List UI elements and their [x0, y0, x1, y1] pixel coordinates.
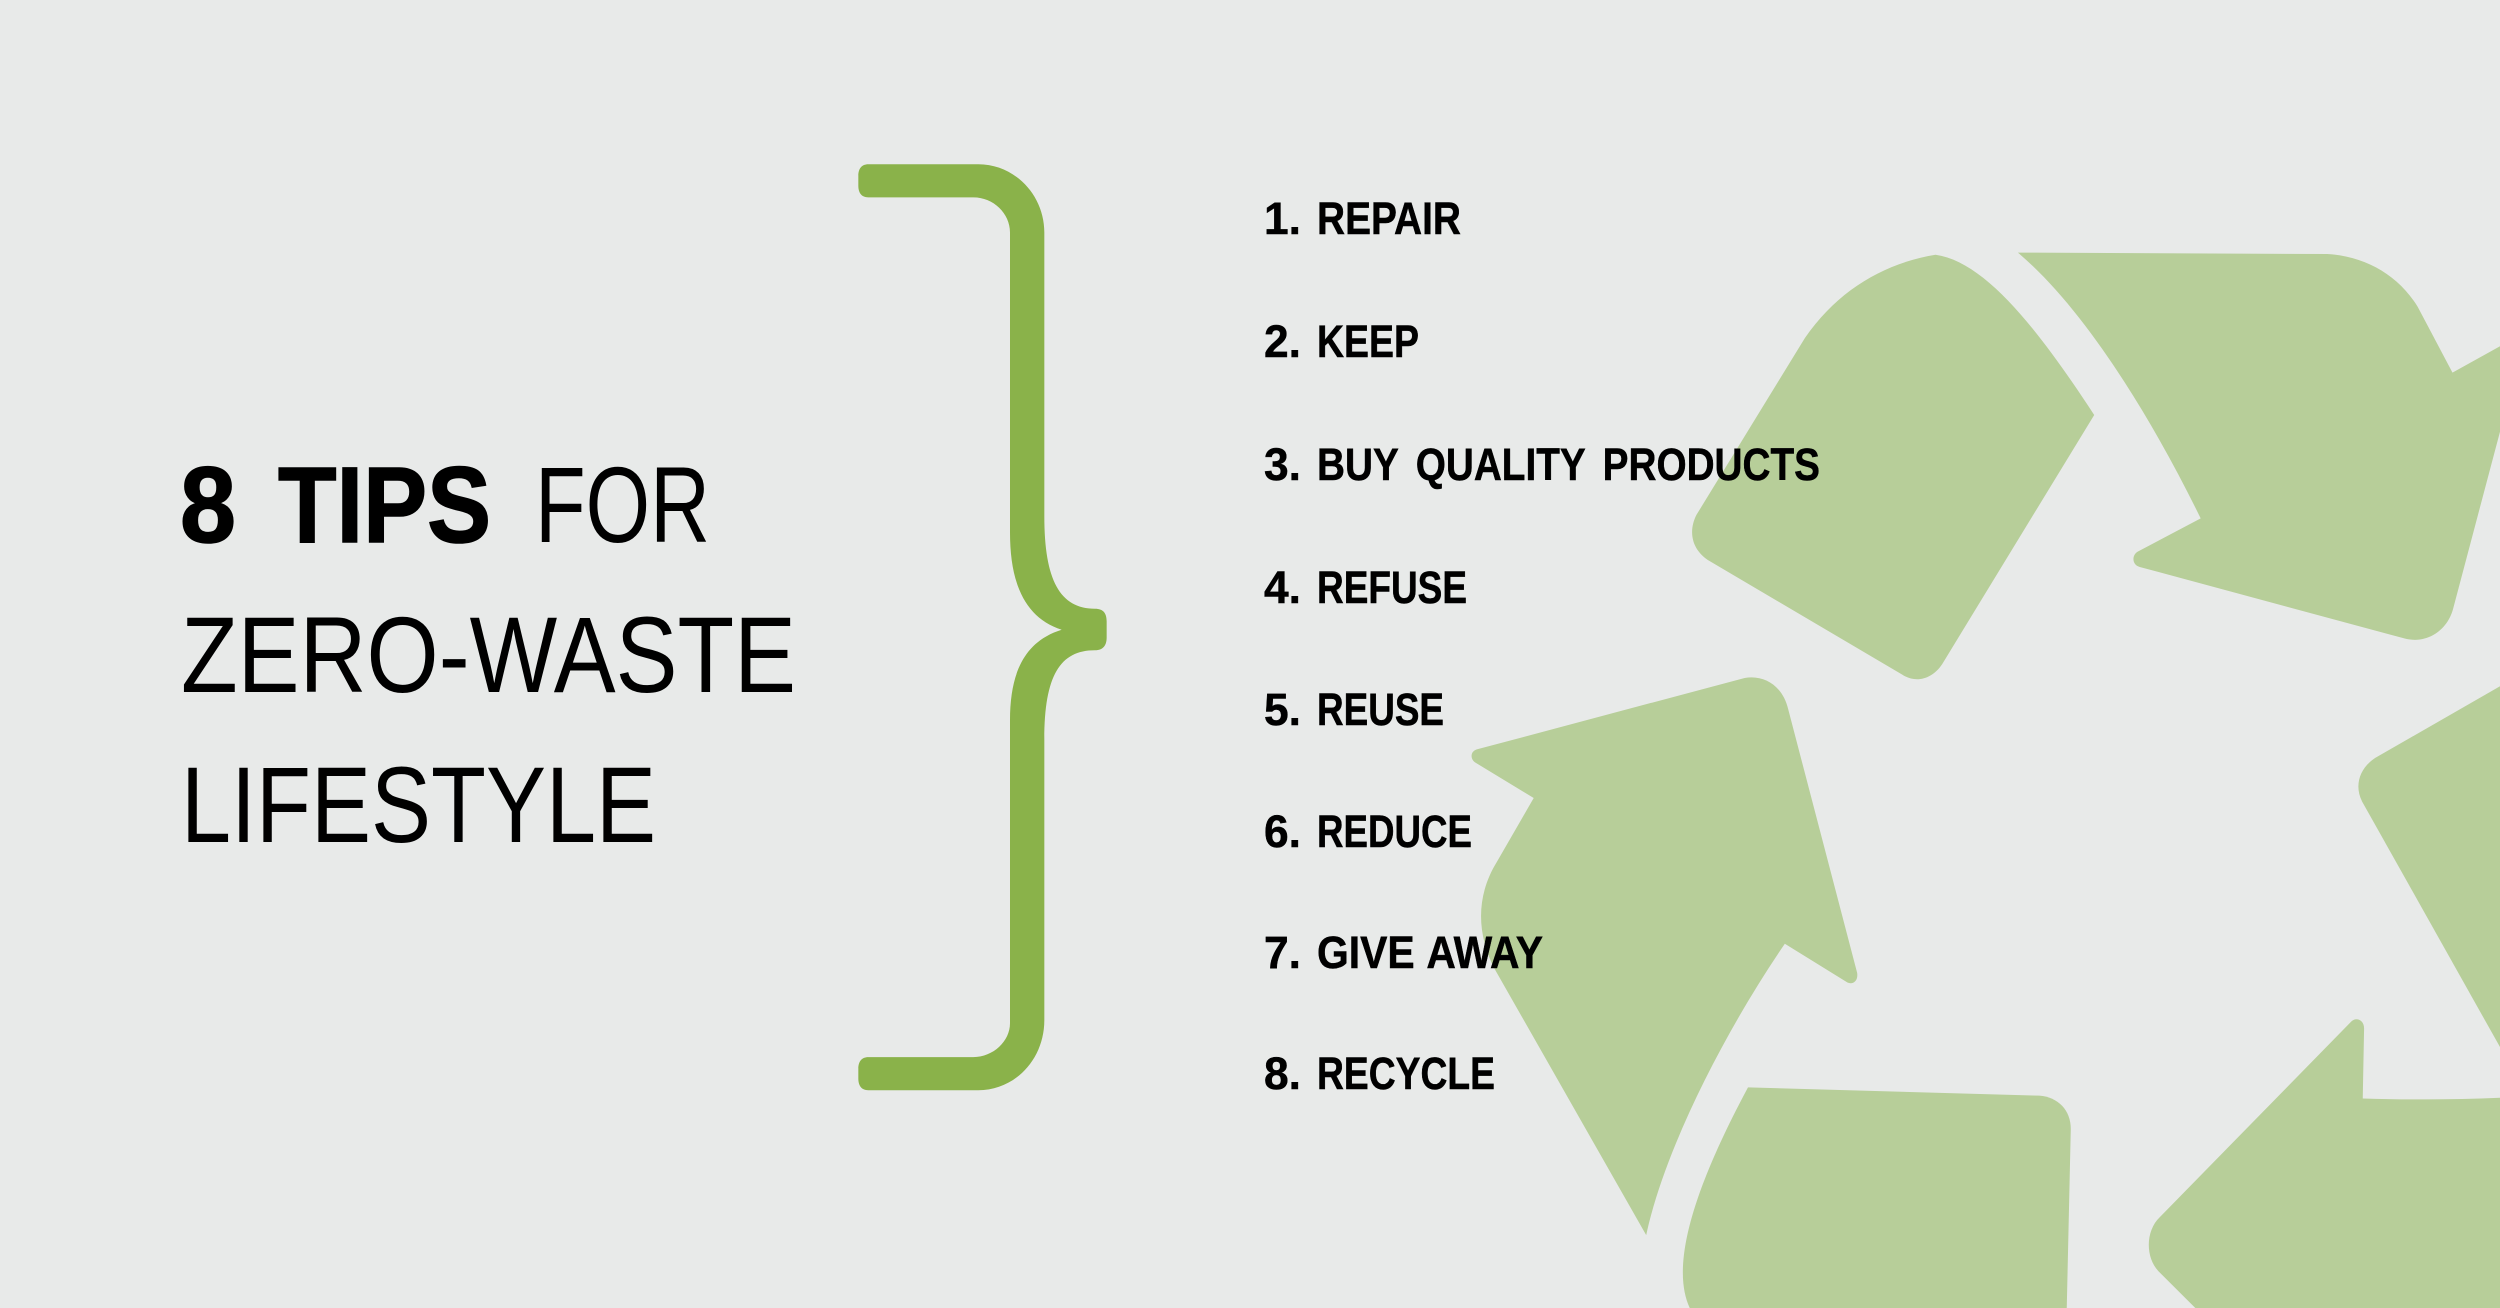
tip 7: 7. [1264, 927, 1301, 978]
tip 4: 4. [1264, 562, 1301, 613]
tips list [1264, 193, 1820, 1099]
title line 1: FOR [535, 445, 710, 565]
recycling arrow segment: top right arrowhead [2018, 253, 2500, 640]
tip 7: GIVE AWAY [1317, 927, 1543, 978]
tip 8: 8. [1264, 1048, 1301, 1099]
tip 1 [1264, 193, 1461, 244]
title line 1 [180, 445, 710, 565]
tip 4: REFUSE [1317, 562, 1467, 613]
tip 1: REPAIR [1317, 193, 1461, 244]
tip 1: 1. [1264, 193, 1301, 244]
tip 3: BUY QUALITY PRODUCTS [1317, 439, 1820, 490]
tip 6: REDUCE [1317, 806, 1472, 857]
tip 5 [1264, 684, 1444, 735]
title line 3: LIFESTYLE [181, 745, 656, 865]
tip 8: RECYCLE [1317, 1048, 1495, 1099]
tip 2: 2. [1264, 316, 1301, 367]
icon: curly brace [858, 164, 1107, 1090]
title line 2: ZERO-WASTE [181, 595, 796, 715]
tip 2 [1264, 316, 1419, 367]
title line 1: TIPS [278, 445, 491, 565]
tip 4 [1264, 562, 1467, 613]
tip 6 [1264, 806, 1472, 857]
title [180, 445, 796, 865]
tip 3: 3. [1264, 439, 1301, 490]
tip 5: 5. [1264, 684, 1301, 735]
recycling arrow segment: bottom body [1683, 1087, 2071, 1308]
recycling arrow segment: bottom right arrowhead [2149, 1019, 2500, 1308]
recycling arrow segment: top body [1692, 255, 2094, 679]
recycling arrow segment: left arrowhead [1472, 677, 1857, 1235]
tip 8 [1264, 1048, 1495, 1099]
tip 6: 6. [1264, 806, 1301, 857]
tip 5: REUSE [1317, 684, 1444, 735]
tip 2: KEEP [1317, 316, 1419, 367]
icon: recycling symbol [1472, 253, 2500, 1308]
recycling arrow segment: right body [2358, 686, 2500, 1047]
title line 1: 8 [180, 445, 236, 565]
